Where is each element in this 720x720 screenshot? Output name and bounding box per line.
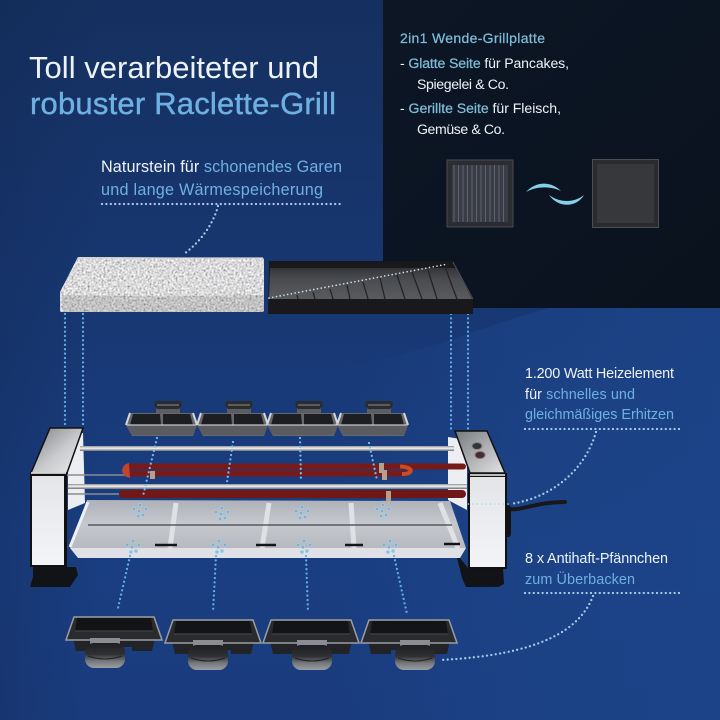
small pan 2 bbox=[197, 401, 268, 436]
large pan 1 bbox=[66, 617, 162, 668]
dotted guides: small pans to large pans bbox=[118, 438, 407, 614]
dotted guides: plates to grill bbox=[65, 314, 468, 432]
icon: ribbed plate side bbox=[447, 160, 513, 227]
callout: heating element: gleichmäßiges Erhitzen bbox=[525, 407, 674, 423]
small pan 3 bbox=[267, 401, 338, 436]
callout: heating element bbox=[466, 366, 682, 504]
text: smooth side bbox=[400, 55, 569, 92]
heating element bbox=[67, 463, 463, 501]
inner side walls bbox=[68, 433, 85, 510]
title bbox=[29, 50, 336, 121]
callout: natural stone bbox=[101, 158, 342, 254]
heading: 2in1 Wende-Grillplatte: 2in1 Wende-Grillplatte bbox=[400, 30, 545, 46]
lower rod bbox=[68, 484, 467, 489]
title: robuster Raclette-Grill bbox=[30, 86, 336, 121]
cord bbox=[508, 502, 565, 509]
small pan 4 bbox=[337, 401, 408, 436]
droplet markers bbox=[125, 503, 398, 554]
granite stone plate bbox=[60, 257, 264, 312]
callout: non-stick pans: 8 x Antihaft-Pfännchen bbox=[525, 551, 668, 567]
large pan 4 bbox=[361, 620, 457, 670]
text: grilled side: Gemüse & Co. bbox=[417, 121, 505, 137]
right end panel bbox=[455, 431, 507, 569]
power controls bbox=[472, 442, 485, 458]
callout: non-stick pans bbox=[440, 551, 682, 660]
large pans row bbox=[66, 617, 457, 670]
small pans row bbox=[126, 401, 408, 436]
drip tray bbox=[70, 500, 466, 548]
large pan 3 bbox=[263, 620, 359, 670]
upper rod bbox=[80, 446, 454, 451]
panel: 2in1 reversible grill plate bbox=[383, 0, 720, 308]
text: grilled side: - Gerillte Seite für Fleisch, bbox=[400, 100, 561, 116]
feet bbox=[30, 505, 511, 587]
callout: heating element: für schnelles und bbox=[525, 387, 635, 403]
black ribbed grill plate bbox=[268, 261, 473, 314]
left end panel bbox=[30, 428, 83, 567]
callout: heating element: 1.200 Watt Heizelement bbox=[525, 366, 674, 382]
text: smooth side: Spiegelei & Co. bbox=[417, 76, 509, 92]
callout: natural stone: und lange Wärmespeicherung bbox=[101, 181, 323, 199]
raclette grill base bbox=[30, 428, 565, 587]
text: smooth side: - Glatte Seite für Pancakes, bbox=[400, 55, 569, 71]
title: Toll verarbeiteter und bbox=[29, 50, 319, 85]
callout: non-stick pans: zum Überbacken bbox=[525, 570, 635, 588]
callout: natural stone: Naturstein für schonendes Garen bbox=[101, 158, 342, 176]
text: grilled side bbox=[400, 100, 561, 137]
large pan 2 bbox=[165, 620, 261, 670]
small pan 1 bbox=[126, 401, 197, 436]
icon: reversal arrows bbox=[526, 184, 584, 205]
icon: smooth plate side bbox=[592, 160, 658, 228]
